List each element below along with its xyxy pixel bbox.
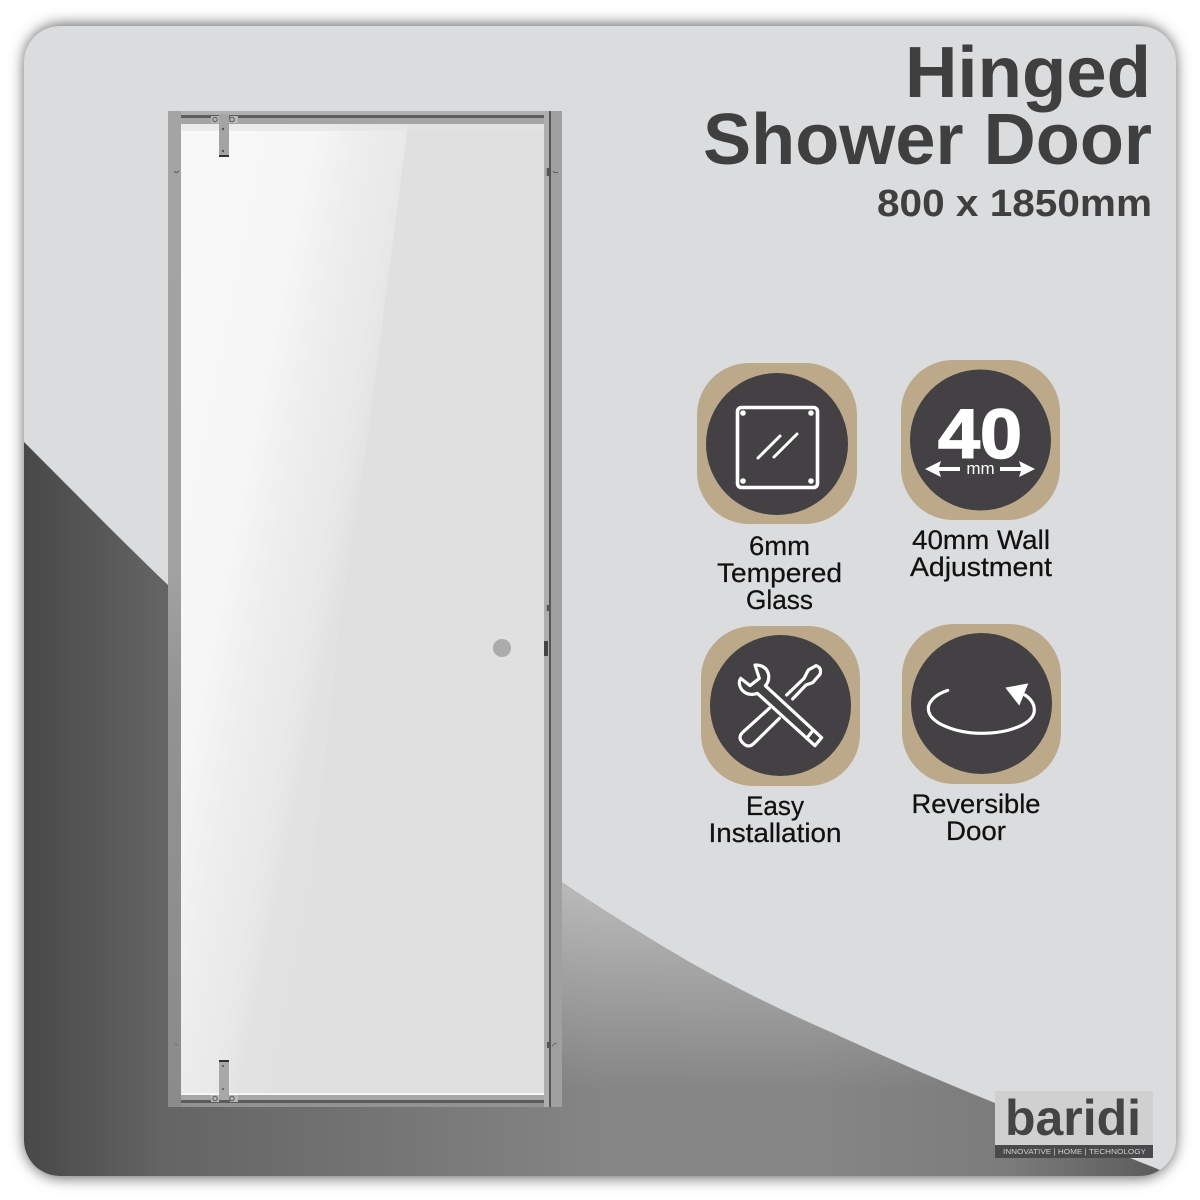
label: Easy <box>746 791 804 821</box>
feature: reversible door <box>902 624 1061 846</box>
latch <box>544 641 548 656</box>
label <box>708 791 842 848</box>
feature: 40mm wall adjustment <box>901 360 1060 582</box>
title: Hinged <box>905 33 1151 113</box>
icon: glass pane <box>697 363 857 524</box>
feature: easy installation <box>701 626 860 848</box>
door handle <box>493 639 511 657</box>
logo: baridi: INNOVATIVE | HOME | TECHNOLOGY <box>1003 1147 1146 1156</box>
icon: 40 mm: 40 <box>938 395 1022 473</box>
title: 800 x 1850mm <box>877 183 1152 225</box>
glass panel <box>181 124 544 1095</box>
top hinge <box>211 114 238 157</box>
frame <box>168 111 562 1107</box>
title <box>703 33 1152 225</box>
label: Adjustment <box>910 552 1053 582</box>
title: Shower Door <box>703 100 1152 180</box>
bottom hinge <box>211 1060 238 1102</box>
icon: wrench and screwdriver <box>701 626 860 786</box>
label <box>910 525 1053 582</box>
label: Door <box>946 816 1006 846</box>
label: 6mm <box>749 531 810 561</box>
label: Installation <box>708 818 842 848</box>
icon: 40 mm <box>901 360 1060 520</box>
logo: baridi: baridi <box>1005 1090 1141 1146</box>
icon: rotation arrow <box>902 624 1061 784</box>
frame fixings <box>174 168 558 1048</box>
label: Glass <box>746 585 813 615</box>
label: Reversible <box>912 789 1040 819</box>
feature: 6mm tempered glass <box>697 363 857 615</box>
label: Tempered <box>717 558 842 588</box>
label <box>912 789 1040 846</box>
label: 40mm Wall <box>912 525 1050 555</box>
label <box>717 531 842 615</box>
icon: 40 mm: mm <box>966 459 995 478</box>
shower door <box>168 111 562 1107</box>
